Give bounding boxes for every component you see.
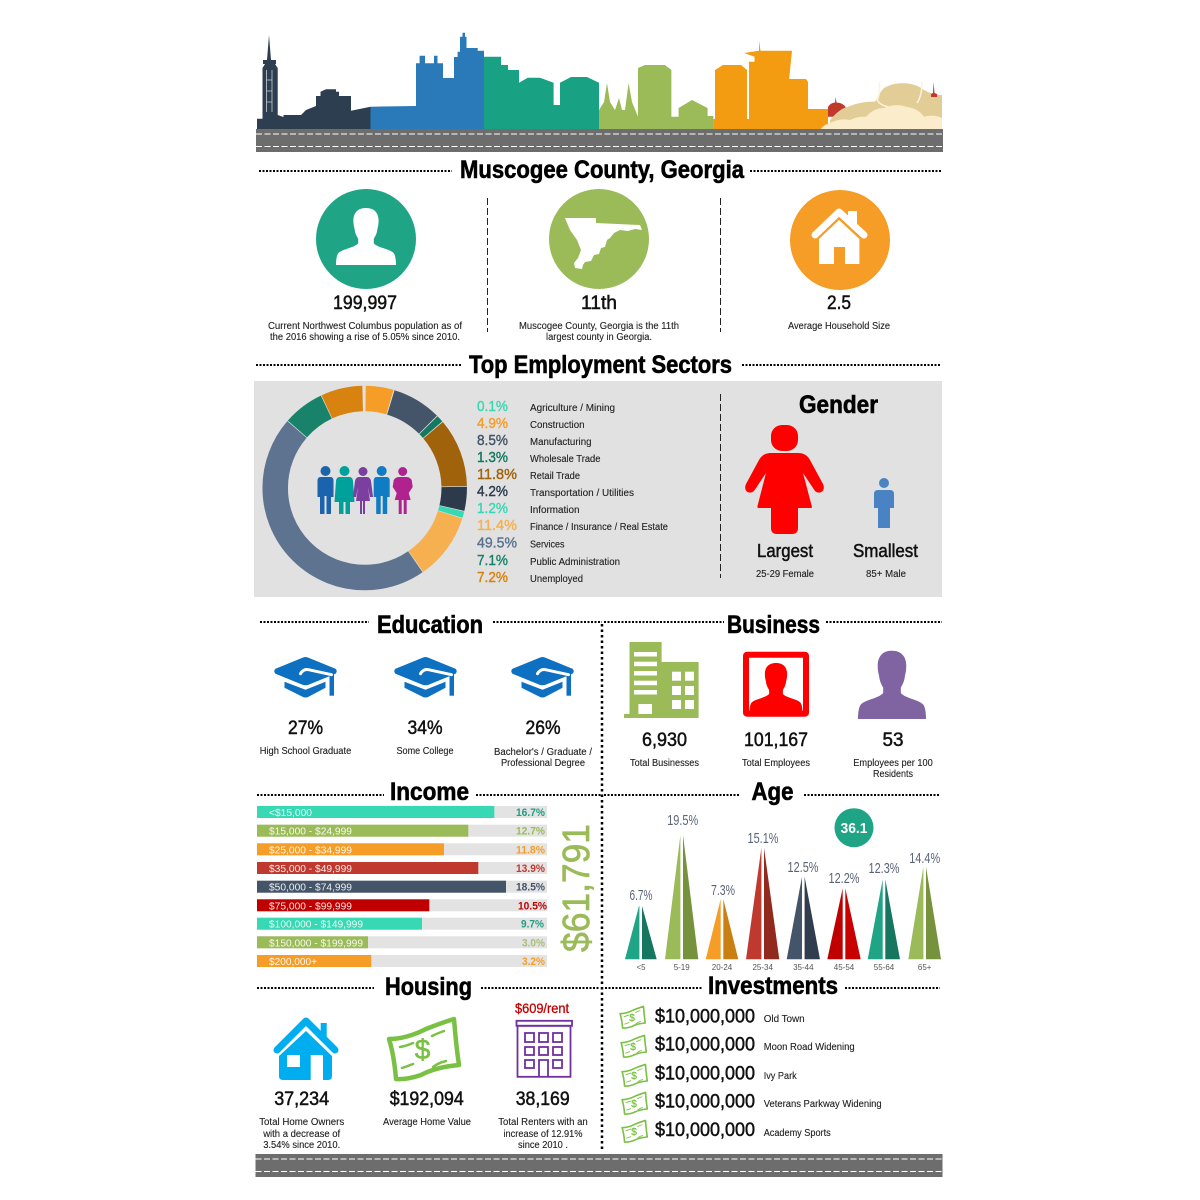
chart: age pyramids: 35-44 (793, 963, 814, 972)
skyline: stadium (821, 82, 942, 129)
legend: sector percentages: 4.2% (477, 483, 508, 500)
panel: income (257, 778, 602, 968)
skyline: teal district (484, 57, 599, 129)
chart: age pyramids (625, 812, 941, 972)
gender: Largest (757, 541, 813, 561)
gender: 25-29 Female (756, 569, 814, 580)
panel: housing: with a decrease of (262, 1129, 340, 1140)
panel: education: 27% (288, 718, 323, 739)
legend: sector percentages (477, 398, 668, 586)
stat: population: the 2016 showing a rise of 5.05% since 2010. (270, 332, 460, 343)
panel: age (604, 778, 941, 972)
legend: sector percentages: 7.1% (477, 552, 508, 569)
legend: sector percentages: 0.1% (477, 398, 508, 415)
skyline: orange district (713, 41, 828, 129)
legend: sector percentages: 49.5% (477, 534, 517, 552)
investment: Veterans Parkway Widening (622, 1092, 882, 1114)
icon: group of workers (318, 466, 413, 514)
chart: age pyramids: 5-19 (674, 963, 690, 972)
bar chart: income brackets: $35,000 - $49,999 (269, 864, 352, 875)
median age badge (834, 808, 874, 847)
top road (256, 129, 943, 152)
legend: sector percentages: 11.8% (477, 466, 517, 483)
stat: county rank (519, 189, 679, 343)
investment: Moon Road Widening: $10,000,000 (655, 1035, 755, 1056)
median income: $61,791 (556, 824, 598, 952)
icon: office building (624, 642, 699, 718)
investment: Academy Sports: $10,000,000 (655, 1120, 755, 1141)
skyline: red dome (828, 97, 846, 117)
panel: education (260, 611, 602, 769)
legend: sector percentages: Services (530, 540, 564, 550)
investment: Old Town: $10,000,000 (655, 1007, 755, 1028)
bar chart: income brackets: $15,000 - $24,999 (269, 827, 352, 838)
stat: county rank: Muscogee County, Georgia is the 11th (519, 321, 679, 332)
legend: sector percentages: Unemployed (530, 574, 583, 585)
panel: housing: since 2010 . (518, 1140, 568, 1151)
icon: employee portrait (746, 655, 806, 714)
investment: Veterans Parkway Widening: Veterans Parkway Widening (764, 1099, 882, 1110)
heading: Business: Business (727, 611, 820, 639)
stat: county rank: 11th (581, 293, 617, 314)
icon: graduation cap (394, 657, 457, 697)
median age badge: 36.1 (840, 820, 868, 837)
bar chart: income brackets: 18.5% (516, 882, 545, 894)
chart: age pyramids: 12.2% (828, 870, 860, 887)
panel: housing: 38,169 (516, 1089, 570, 1110)
panel: employment sectors and gender (254, 381, 942, 597)
bottom road (256, 1154, 942, 1177)
panel: business: Residents (873, 769, 913, 780)
icon: banknote: $ (415, 1034, 431, 1065)
panel: business: 53 (882, 730, 904, 751)
icon: resident bust (858, 651, 926, 719)
legend: sector percentages: 4.9% (477, 415, 508, 432)
icon: smallest male (874, 478, 894, 528)
heading: Muscogee County, Georgia: Muscogee County, Georgia (460, 156, 745, 184)
bar chart: income brackets: $150,000 - $199,999 (269, 938, 363, 949)
skyline (257, 33, 942, 129)
legend: sector percentages: 11.4% (477, 517, 517, 534)
skyline: green district (599, 65, 713, 129)
legend: sector percentages: 1.2% (477, 500, 508, 517)
stat: household size: 2.5 (827, 293, 851, 314)
panel: education: Professional Degree (501, 758, 585, 769)
bar chart: income brackets: 11.8% (516, 844, 545, 856)
legend: sector percentages: Finance / Insurance / Real Estate (530, 522, 668, 533)
legend: sector percentages: Agriculture / Mining (530, 403, 615, 414)
legend: sector percentages: 8.5% (477, 432, 508, 449)
bar chart: income brackets (257, 806, 547, 968)
panel: education: Some College (396, 746, 454, 757)
heading: Education: Education (377, 611, 483, 639)
investment: Moon Road Widening: $ (630, 1042, 636, 1053)
gender: 85+ Male (866, 569, 906, 580)
panel: investments (605, 972, 940, 1142)
bar chart: income brackets: $75,000 - $99,999 (269, 901, 352, 912)
legend: sector percentages: 1.3% (477, 449, 508, 466)
panel: education: Bachelor's / Graduate / (494, 747, 592, 758)
icon: largest female (745, 425, 824, 534)
heading: Housing: Housing (385, 973, 472, 1001)
legend: sector percentages: Information (530, 505, 580, 516)
stat: household size (788, 190, 890, 332)
investment: Ivy Park (622, 1063, 798, 1086)
legend: sector percentages: 7.2% (477, 569, 508, 586)
bar chart: income brackets: 3.2% (522, 956, 545, 968)
heading: Age: Age (752, 778, 794, 806)
bar chart: income brackets: $100,000 - $149,999 (269, 920, 363, 931)
rent price: $609/rent (515, 1000, 569, 1016)
stat: county rank: largest county in Georgia. (546, 332, 652, 343)
legend: sector percentages: Construction (530, 420, 584, 431)
chart: age pyramids: <5 (636, 963, 646, 972)
investment: Academy Sports: $ (631, 1127, 637, 1138)
chart: age pyramids: 65+ (918, 963, 932, 972)
panel: housing: 3.54% since 2010. (263, 1140, 340, 1151)
panel: education: High School Graduate (260, 746, 352, 757)
panel: business (604, 611, 942, 780)
investment: Academy Sports (622, 1120, 831, 1142)
chart: age pyramids: 7.3% (711, 882, 735, 899)
skyline: navy district (257, 35, 370, 129)
bar chart: income brackets: 13.9% (516, 863, 545, 875)
chart: age pyramids: 55-64 (874, 963, 895, 972)
investment: Academy Sports: Academy Sports (764, 1128, 831, 1139)
legend: sector percentages: Retail Trade (530, 471, 580, 482)
investment: Moon Road Widening (621, 1035, 855, 1057)
donut chart: employment sectors (275, 398, 454, 578)
bar chart: income brackets: $50,000 - $74,999 (269, 883, 352, 894)
panel: business: 6,930 (642, 730, 687, 751)
investment: Ivy Park: Ivy Park (764, 1071, 798, 1082)
icon: blue house (277, 1021, 335, 1080)
panel: business: Total Businesses (630, 758, 699, 769)
icon: apartment building (516, 1021, 572, 1077)
panel: county key stats (268, 189, 890, 343)
gender: Smallest (853, 541, 918, 561)
bar chart: income brackets: 3.0% (522, 937, 545, 949)
panel: housing: 37,234 (274, 1089, 330, 1110)
heading: Investments: Investments (708, 972, 838, 1000)
investment: Old Town: Old Town (764, 1014, 805, 1025)
chart: age pyramids: 25-34 (752, 963, 773, 972)
bar chart: income brackets: 9.7% (521, 919, 544, 931)
bar chart: income brackets: 16.7% (516, 807, 545, 819)
investment: Old Town: $ (629, 1013, 635, 1024)
stat: population: Current Northwest Columbus population as of (268, 321, 462, 332)
chart: age pyramids: 6.7% (630, 887, 652, 904)
icon: graduation cap (274, 657, 337, 697)
legend: sector percentages: Manufacturing (530, 437, 592, 448)
panel: education: 26% (526, 718, 561, 739)
chart: age pyramids: 19.5% (667, 812, 698, 829)
chart: age pyramids: 45-54 (834, 963, 855, 972)
panel: housing (257, 973, 600, 1151)
panel: business: Employees per 100 (853, 758, 933, 769)
bar chart: income brackets: $200,000+ (269, 957, 317, 968)
panel: housing: increase of 12.91% (504, 1129, 583, 1140)
bar chart: income brackets: 12.7% (516, 826, 545, 838)
chart: age pyramids: 12.5% (788, 859, 818, 876)
investment: Old Town (620, 1006, 805, 1028)
icon: banknote (389, 1019, 459, 1079)
chart: age pyramids: 20-24 (712, 963, 733, 972)
panel: housing: $192,094 (390, 1089, 464, 1110)
icon: graduation cap (511, 657, 574, 697)
panel: housing: Average Home Value (383, 1117, 471, 1128)
investment: Ivy Park: $10,000,000 (655, 1063, 755, 1084)
chart: age pyramids: 14.4% (909, 850, 940, 867)
stat: household size: Average Household Size (788, 321, 890, 332)
gender (745, 391, 918, 580)
chart: age pyramids: 15.1% (748, 830, 778, 847)
chart: age pyramids: 12.3% (868, 860, 900, 877)
investment: Veterans Parkway Widening: $ (631, 1099, 637, 1110)
panel: business: Total Employees (742, 758, 810, 769)
legend: sector percentages: Wholesale Trade (530, 454, 601, 465)
panel: education: 34% (408, 718, 443, 739)
gender: Gender (799, 391, 878, 419)
legend: sector percentages: Public Administration (530, 557, 620, 568)
panel: housing: Total Home Owners (259, 1117, 344, 1128)
stat: population: 199,997 (333, 293, 397, 314)
bar chart: income brackets: <$15,000 (269, 808, 312, 819)
legend: sector percentages: Transportation / Utilities (530, 488, 634, 499)
bar chart: income brackets: $25,000 - $34,999 (269, 845, 352, 856)
investment: Moon Road Widening: Moon Road Widening (764, 1042, 855, 1053)
panel: business: 101,167 (744, 730, 808, 751)
panel: housing: Total Renters with an (498, 1117, 588, 1128)
bar chart: income brackets: 10.5% (518, 900, 547, 912)
heading: Top Employment Sectors: Top Employment Sectors (469, 351, 732, 379)
heading: Income: Income (390, 778, 469, 806)
skyline: blue district (370, 33, 484, 129)
investment: Ivy Park: $ (631, 1071, 637, 1082)
stat: population (268, 189, 462, 343)
investment: Veterans Parkway Widening: $10,000,000 (655, 1092, 755, 1113)
